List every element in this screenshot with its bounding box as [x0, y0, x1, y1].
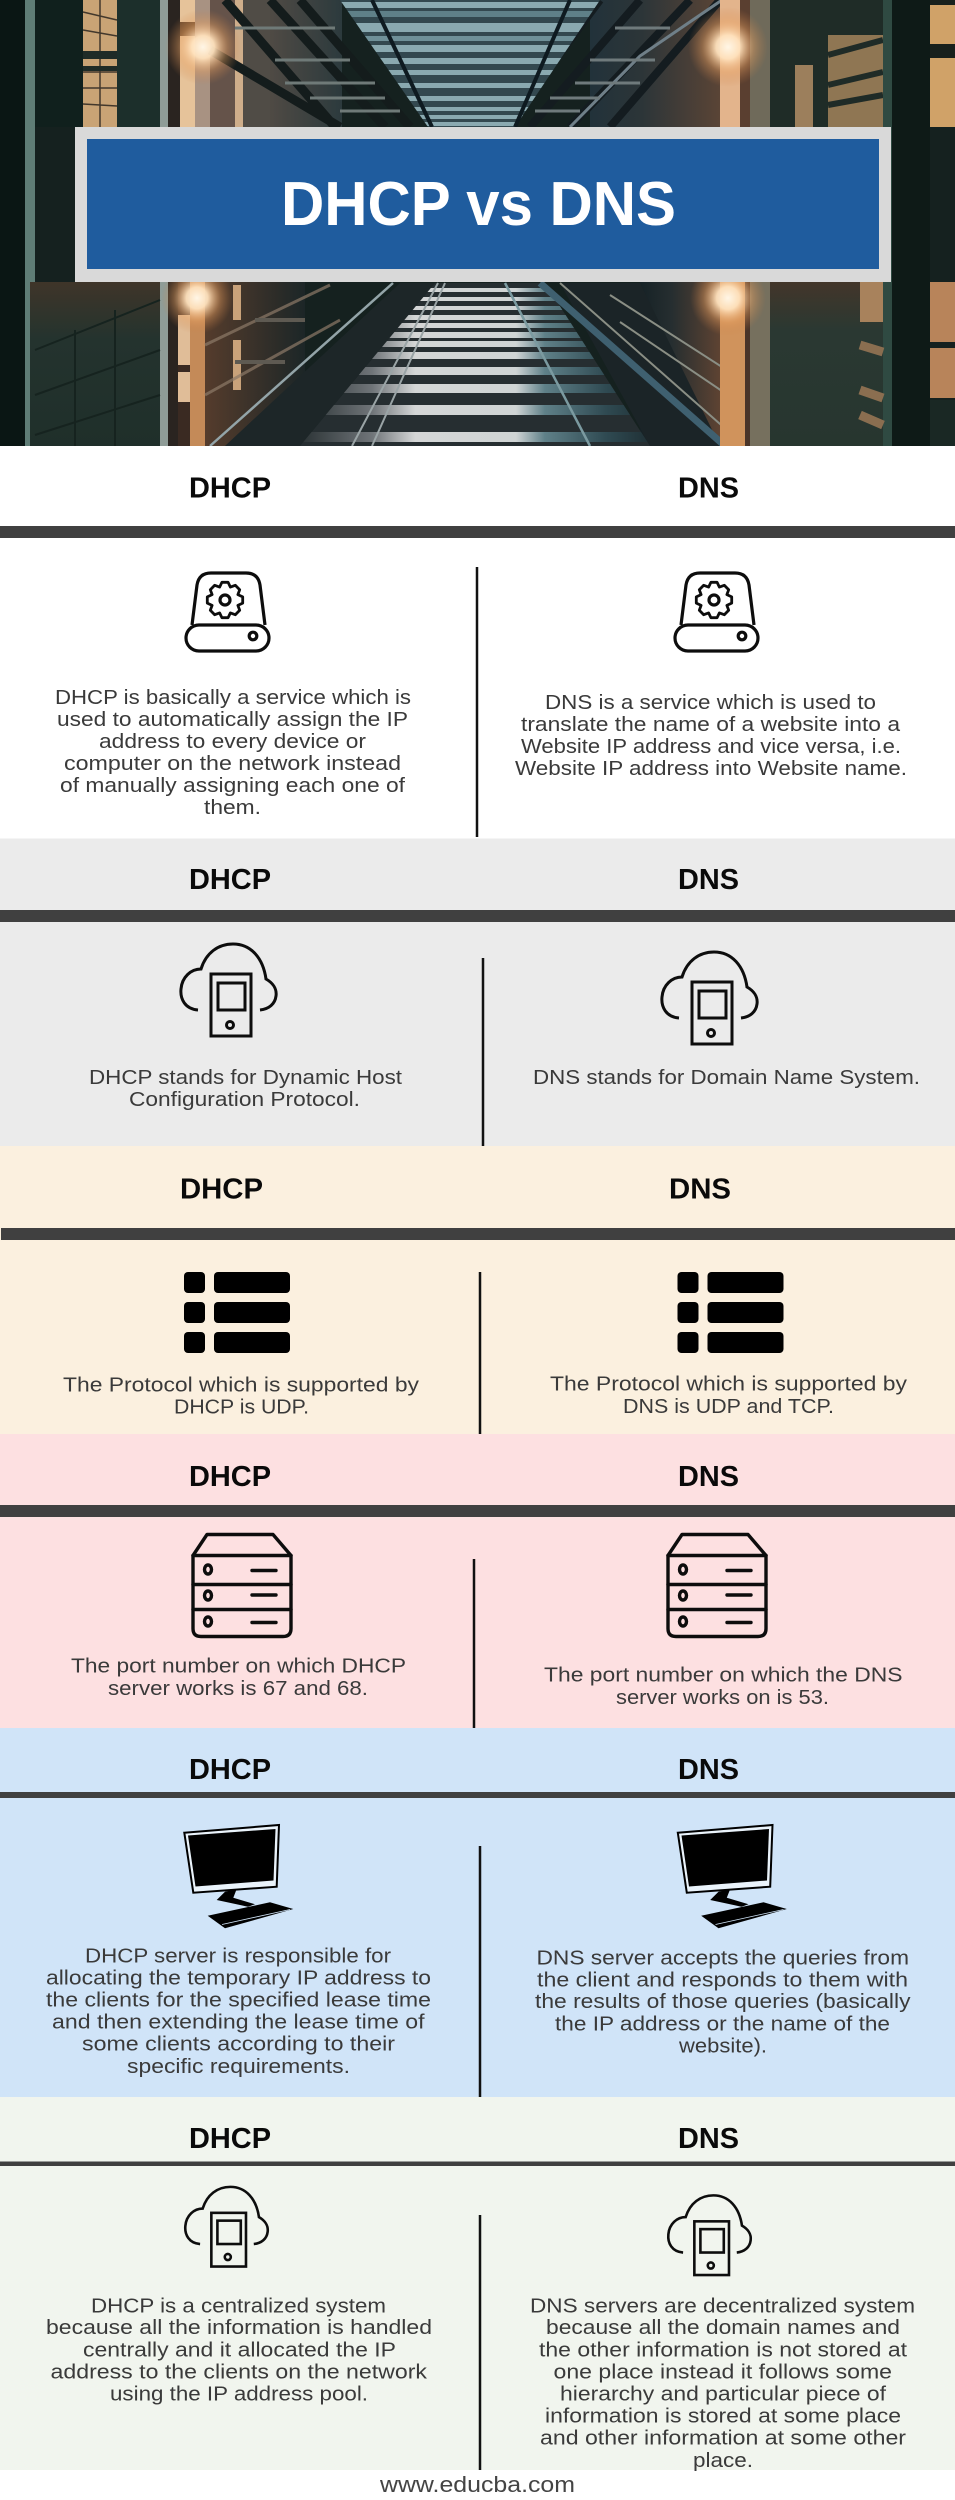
panel: protocol (peach): [0, 1146, 955, 1435]
title: DHCP vs DNS: [281, 170, 676, 239]
column headings: DNS: [678, 472, 739, 504]
text: DNS server role: DNS server accepts the queries from: [536, 1947, 909, 1969]
text: DHCP full form: Configuration Protocol.: [129, 1089, 360, 1111]
text: DHCP centralized: DHCP is a centralized system: [91, 2296, 386, 2318]
text: DHCP description: [55, 687, 411, 819]
text: DNS description: translate the name of a website into a: [521, 714, 901, 736]
text: DHCP centralized: using the IP address pool.: [110, 2383, 368, 2405]
text: DNS full form: DNS stands for Domain Name System.: [533, 1067, 920, 1089]
text: DNS decentralized: and other information at some other: [540, 2428, 906, 2450]
icon: list DNS: [678, 1272, 784, 1353]
column headings: DNS: [669, 1174, 731, 1206]
text: DNS port: The port number on which the DNS: [544, 1665, 902, 1687]
icon: gear disk DHCP: [186, 573, 269, 651]
icon: list DHCP: [184, 1272, 290, 1353]
icon: monitor DNS: [678, 1825, 787, 1928]
text: DHCP centralized: centrally and it allocated the IP: [83, 2339, 396, 2361]
text: DHCP server role: specific requirements.: [127, 2056, 350, 2078]
text: DNS server role: the IP address or the name of the: [555, 2013, 890, 2035]
text: DHCP full form: DHCP stands for Dynamic Host: [89, 1067, 402, 1089]
text: DNS port: [544, 1665, 902, 1709]
text: DNS description: [515, 692, 907, 780]
text: DNS decentralized: DNS servers are decentralized system: [530, 2296, 915, 2318]
panel: port number (pink): [0, 1434, 955, 1728]
text: DHCP full form: [89, 1067, 402, 1111]
panel: architecture (green): [0, 2097, 955, 2472]
icon: cloud device DHCP: [181, 944, 276, 1036]
text: DNS decentralized: [530, 2296, 915, 2472]
text: DHCP server role: allocating the temporary IP address to: [46, 1968, 431, 1990]
text: DNS server role: website).: [678, 2036, 767, 2058]
panel: what it is (white): [0, 446, 955, 838]
icon: cloud device DNS: [662, 952, 757, 1044]
column headings: DHCP: [189, 864, 271, 896]
text: DNS decentralized: one place instead it follows some: [554, 2362, 892, 2384]
text: DNS description: Website IP address and vice versa, i.e.: [521, 736, 901, 758]
text: DHCP description: used to automatically assign the IP: [57, 709, 408, 731]
column headings: DHCP: [189, 472, 271, 504]
text: DHCP server role: the clients for the specified lease time: [46, 1989, 431, 2011]
panel: full form (grey): [0, 838, 955, 1148]
column headings: [189, 864, 739, 896]
icon: gear disk DNS: [675, 573, 758, 651]
text: DHCP centralized: [46, 2296, 432, 2405]
icon: server DNS: [668, 1534, 766, 1636]
text: DNS server role: the results of those queries (basically: [535, 1991, 910, 2013]
column headings: DNS: [678, 1754, 739, 1786]
text: DHCP port: The port number on which DHCP: [71, 1656, 406, 1678]
text: DHCP description: DHCP is basically a service which is: [55, 687, 411, 709]
panel: server role (blue): [0, 1728, 955, 2097]
title banner: [75, 127, 891, 282]
column headings: DHCP: [189, 1754, 271, 1786]
column headings: [189, 2123, 739, 2155]
text: DNS decentralized: place.: [693, 2450, 753, 2472]
text: DHCP server role: some clients according to their: [82, 2034, 395, 2056]
text: DHCP protocol: [63, 1374, 419, 1419]
text: DHCP description: of manually assigning each one of: [60, 775, 406, 797]
text: DHCP server role: DHCP server is responsible for: [85, 1945, 391, 1967]
text: DNS protocol: DNS is UDP and TCP.: [623, 1396, 834, 1418]
text: DHCP port: server works is 67 and 68.: [108, 1678, 368, 1700]
text: DHCP server role: [46, 1945, 431, 2078]
text: DNS server role: [535, 1947, 910, 2058]
text: DNS decentralized: because all the domain names and: [546, 2317, 900, 2339]
text: DNS decentralized: the other information is not stored at: [539, 2339, 907, 2361]
text: DNS protocol: [550, 1374, 907, 1418]
column headings: [189, 472, 739, 504]
icon: cloud device DHCP small: [185, 2187, 268, 2267]
text: DNS server role: the client and responds to them with: [537, 1969, 908, 1991]
text: DNS protocol: The Protocol which is supported by: [550, 1374, 907, 1396]
column headings: [189, 1754, 739, 1786]
text: DNS description: Website IP address into Website name.: [515, 758, 907, 780]
icon: server DHCP: [193, 1534, 291, 1636]
text: DHCP description: computer on the network instead: [64, 753, 401, 775]
text: DNS decentralized: information is stored at some place: [545, 2406, 901, 2428]
column headings: DHCP: [189, 2123, 271, 2155]
icon: monitor DHCP: [184, 1825, 293, 1928]
text: DNS description: DNS is a service which is used to: [545, 692, 876, 714]
column headings: DNS: [678, 2123, 739, 2155]
text: DNS decentralized: hierarchy and particular piece of: [560, 2383, 886, 2405]
column headings: DHCP: [180, 1174, 263, 1206]
column headings: [189, 1461, 739, 1493]
column headings: DHCP: [189, 1461, 271, 1493]
text: DHCP centralized: because all the information is handled: [46, 2317, 432, 2339]
text: DHCP protocol: The Protocol which is supported by: [63, 1374, 419, 1396]
hero photo: data centre corridor: [0, 0, 955, 446]
column headings: DNS: [678, 864, 739, 896]
column headings: [180, 1174, 731, 1206]
column headings: DNS: [678, 1461, 739, 1493]
text: DNS port: server works on is 53.: [616, 1687, 829, 1709]
footer website: www.educba.com: [379, 2472, 575, 2497]
text: DHCP port: [71, 1656, 406, 1700]
icon: cloud device DNS small: [668, 2195, 751, 2275]
text: DHCP description: address to every device or: [99, 731, 366, 753]
text: DHCP server role: and then extending the lease time of: [52, 2011, 425, 2033]
text: DHCP description: them.: [204, 797, 261, 819]
text: DHCP protocol: DHCP is UDP.: [174, 1397, 309, 1419]
text: DHCP centralized: address to the clients on the network: [50, 2362, 428, 2384]
